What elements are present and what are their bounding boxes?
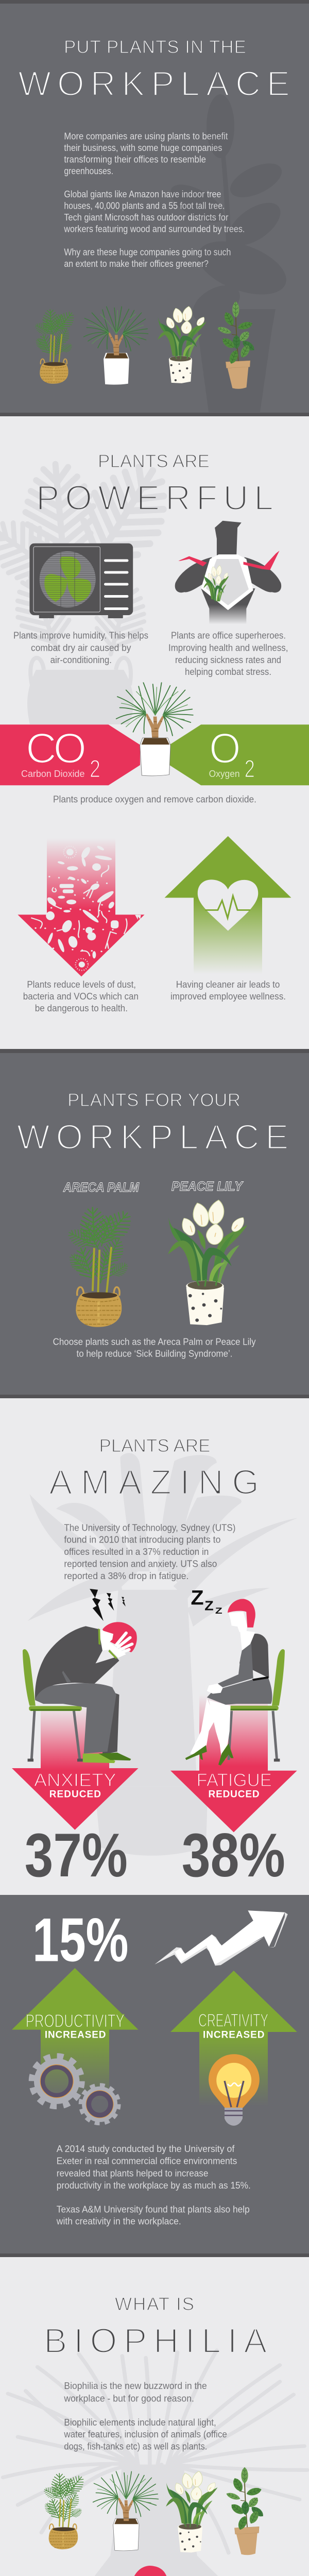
text: choose plants: Choose plants such as the Areca Palm or Peace Lily xyxy=(53,1336,256,1347)
heading: plants are powerful: PLANTS ARE xyxy=(98,451,210,471)
label: peace lily: PEACE LILY xyxy=(171,1179,244,1194)
text: Exeter and Texas studies: productivity in the workplace by as much as 15%. xyxy=(57,2180,251,2191)
text: humidity: air-conditioning. xyxy=(50,655,112,665)
illustration: stressed man on chair xyxy=(23,1589,137,1763)
text: UTS study: offices resulted in a 37% reduction in xyxy=(64,1547,209,1557)
panel: productivity and creativity xyxy=(12,1905,297,2227)
text: cleaner air: improved employee wellness. xyxy=(170,991,286,1002)
text: superheroes xyxy=(168,631,288,677)
plants row: four office plants xyxy=(33,301,256,389)
illustration: tired woman on chair: Z xyxy=(204,1599,214,1614)
illustration: tired woman on chair: Z xyxy=(191,1586,204,1609)
silhouette: peace lily xyxy=(28,1453,298,1856)
label: areca palm: ARECA PALM xyxy=(63,1180,140,1195)
text: humidity: Plants improve humidity. This helps xyxy=(13,631,148,641)
heading: plants are amazing: PLANTS ARE xyxy=(99,1436,210,1456)
text block: intro xyxy=(64,131,245,269)
text block: intro: workers featuring wood and surrounded by trees. xyxy=(64,224,245,234)
arrow: creativity increased: CREATIVITY xyxy=(198,2011,268,2031)
arrow: fatigue reduced xyxy=(170,1694,297,1832)
text: superheroes: helping combat stress. xyxy=(185,667,271,677)
text: dust and bacteria xyxy=(23,979,139,1013)
text block: intro: transforming their offices to resemble xyxy=(64,155,206,165)
stat: 15 percent: 15% xyxy=(32,1905,129,1974)
silhouette: ficus behind intro xyxy=(165,94,294,412)
text: choose plants: to help reduce ‘Sick Building Syndrome’. xyxy=(76,1349,233,1359)
icon: peace lily xyxy=(166,2470,217,2553)
text block: intro: greenhouses. xyxy=(64,166,113,176)
heading: put plants in the workplace: PUT PLANTS IN THE xyxy=(64,37,246,57)
text: biophilia buzzword: dogs, fish-tanks etc) as well as plants. xyxy=(64,2441,207,2451)
arrow: rising zigzag xyxy=(154,1910,288,1965)
heading: plants for your workplace: WORKPLACE xyxy=(16,1117,288,1157)
icon: heart with pulse xyxy=(198,879,258,931)
icon: areca palm xyxy=(65,1206,137,1327)
icon: dracaena xyxy=(84,307,148,385)
text: UTS study: The University of Technology, Sydney (UTS) xyxy=(64,1522,235,1533)
icon: air conditioner xyxy=(29,544,133,618)
text: UTS study: reported a 38% drop in fatigue. xyxy=(64,1571,188,1581)
panel: plants are amazing xyxy=(12,1436,298,1890)
arrow: anxiety reduced: ANXIETY xyxy=(34,1770,116,1790)
icon: peace lily xyxy=(168,1199,247,1325)
arrow: fatigue reduced: FATIGUE xyxy=(197,1770,272,1790)
banner: carbon dioxide: CO xyxy=(26,724,87,772)
heading: put plants in the workplace: WORKPLACE xyxy=(18,64,290,104)
arrow: productivity increased: INCREASED xyxy=(45,2030,106,2041)
icon: areca palm xyxy=(33,309,78,384)
icon: peace lily xyxy=(158,306,207,383)
text block: intro: More companies are using plants to benefit xyxy=(64,131,228,141)
arrow: productivity increased: PRODUCTIVITY xyxy=(26,2011,125,2031)
illustration: meditating man xyxy=(67,2566,243,2576)
banner: oxygen xyxy=(169,724,309,785)
plants row: biophilia xyxy=(42,2467,265,2555)
silhouette: palm and urn xyxy=(0,451,184,724)
text block: intro: Tech giant Microsoft has outdoor districts for xyxy=(64,212,228,223)
heading: what is biophilia xyxy=(44,2294,267,2360)
text: biophilia buzzword: water features, inclusion of animals (office xyxy=(63,2429,227,2439)
icon: dracaena xyxy=(93,2471,158,2551)
text block: intro: their business, with some huge companies xyxy=(64,143,222,153)
illustration: tired woman on chair xyxy=(185,1586,285,1766)
icon: light bulb xyxy=(209,2054,260,2126)
text: biophilia buzzword xyxy=(63,2381,227,2451)
illustration: tired woman on chair: Z xyxy=(215,1606,222,1616)
text: cleaner air xyxy=(170,979,286,1002)
text: superheroes: reducing sickness rates and xyxy=(175,655,281,665)
text: choose plants xyxy=(53,1336,256,1359)
text: Exeter and Texas studies: Exeter in real commercial office environments xyxy=(57,2156,237,2166)
text: Exeter and Texas studies: A 2014 study conducted by the University of xyxy=(57,2144,235,2154)
icon: microbes xyxy=(31,845,141,971)
text block: intro: Global giants like Amazon have indoor tree xyxy=(64,189,221,199)
banner: carbon dioxide: Carbon Dioxide xyxy=(21,769,84,779)
arrow: creativity increased: INCREASED xyxy=(203,2030,265,2041)
panel: plants are powerful xyxy=(0,451,309,1013)
text block: intro: houses, 40,000 plants and a 55 foot tall tree. xyxy=(64,201,225,211)
heading: what is biophilia: BIOPHILIA xyxy=(44,2321,267,2360)
text: dust and bacteria: bacteria and VOCs which can xyxy=(23,991,139,1002)
arrow: fatigue reduced: REDUCED xyxy=(208,1789,260,1800)
arrow: productivity increased xyxy=(12,1968,139,2100)
text: biophilia buzzword: workplace - but for good reason. xyxy=(63,2393,194,2403)
icon: dracaena between banners xyxy=(116,683,193,776)
arrow: bacteria reduced xyxy=(18,838,145,976)
heading: plants are powerful xyxy=(36,451,273,518)
banner: carbon dioxide xyxy=(0,724,140,785)
text: superheroes: Plants are office superheroes. xyxy=(171,631,286,641)
heading: put plants in the workplace xyxy=(18,37,290,104)
text: oxygen caption: Plants produce oxygen and remove carbon dioxide. xyxy=(53,794,256,805)
text: humidity: combat dry air caused by xyxy=(31,642,131,653)
icon: ficus xyxy=(216,301,256,389)
icon: areca palm xyxy=(42,2472,88,2549)
text: humidity xyxy=(13,631,148,665)
arrow: creativity increased xyxy=(170,1971,297,2106)
arrow: anxiety reduced: REDUCED xyxy=(49,1789,101,1800)
heading: what is biophilia: WHAT IS xyxy=(115,2294,194,2314)
text: cleaner air: Having cleaner air leads to xyxy=(176,979,280,990)
text: biophilia buzzword: Biophilic elements include natural light, xyxy=(64,2417,216,2428)
banner: carbon dioxide: 2 xyxy=(90,756,100,783)
text: biophilia buzzword: Biophilia is the new buzzword in the xyxy=(64,2381,207,2391)
stat: 37 percent: 37% xyxy=(25,1821,128,1890)
banner: oxygen: 2 xyxy=(244,756,255,783)
text: Exeter and Texas studies: Texas A&M University found that plants also help xyxy=(57,2204,250,2214)
text: UTS study xyxy=(64,1522,235,1581)
text: Exeter and Texas studies xyxy=(56,2144,251,2227)
arrow: wellness up xyxy=(165,836,291,974)
panel: what is biophilia xyxy=(3,2294,307,2576)
text: dust and bacteria: be dangerous to health. xyxy=(35,1003,128,1013)
heading: plants are amazing xyxy=(49,1436,259,1502)
icon: superhero with plant xyxy=(175,521,281,624)
heading: plants are amazing: AMAZING xyxy=(49,1463,259,1502)
text: UTS study: found in 2010 that introducing plants to xyxy=(64,1535,220,1545)
banner: oxygen: O xyxy=(209,724,241,772)
arrow: anxiety reduced xyxy=(12,1706,139,1830)
text block: intro: Why are these huge companies going to such xyxy=(64,247,231,258)
text block: intro: an extent to make their offices greener? xyxy=(64,259,209,269)
banner: oxygen: Oxygen xyxy=(209,769,240,779)
panel: plants for your workplace 1 xyxy=(16,1090,288,1359)
icon: gears xyxy=(31,2056,119,2124)
heading: plants are powerful: POWERFUL xyxy=(36,479,273,518)
text: UTS study: reported tension and anxiety. UTS also xyxy=(64,1558,217,1569)
silhouette: dracaena xyxy=(3,2350,307,2576)
text: superheroes: Improving health and wellness, xyxy=(168,642,288,653)
text: Exeter and Texas studies: revealed that plants helped to increase xyxy=(57,2168,208,2178)
stat: 38 percent: 38% xyxy=(182,1821,285,1890)
heading: plants for your workplace: PLANTS FOR YOUR xyxy=(67,1090,241,1110)
text: dust and bacteria: Plants reduce levels of dust, xyxy=(27,979,136,990)
heading: plants for your workplace xyxy=(16,1090,288,1157)
icon: ficus xyxy=(226,2467,265,2555)
text: Exeter and Texas studies: with creativity in the workplace. xyxy=(56,2216,181,2227)
